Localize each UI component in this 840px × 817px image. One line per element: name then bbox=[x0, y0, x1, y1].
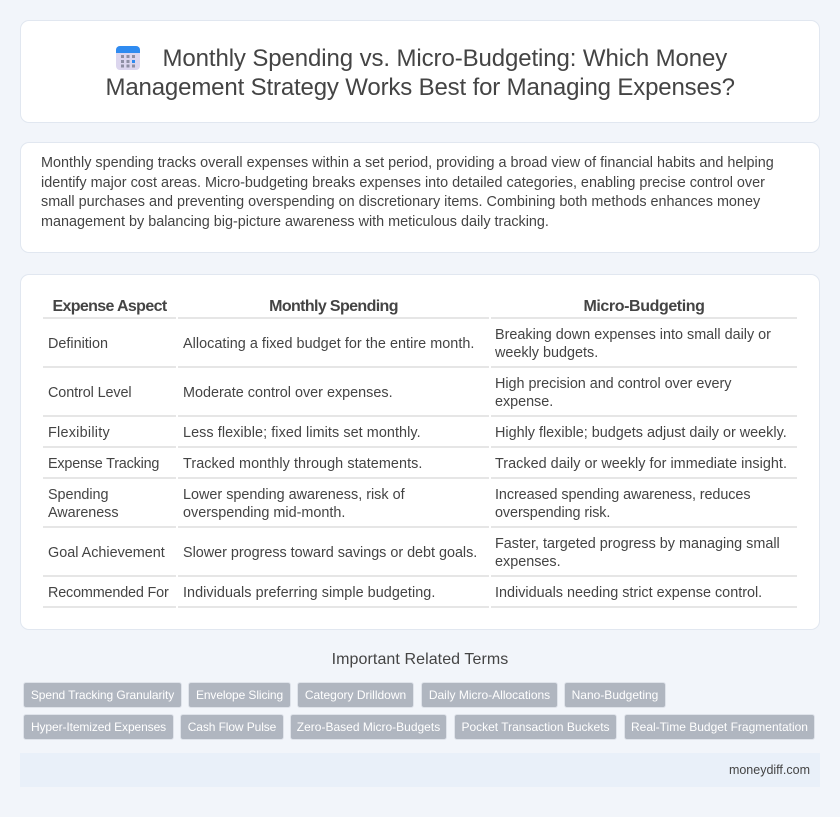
summary text: identify major cost areas. Micro-budgeting breaks expenses into detailed categories, enabling precise control over bbox=[41, 175, 765, 191]
related terms tags: Pocket Transaction Buckets bbox=[461, 720, 610, 734]
title: Monthly Spending vs. Micro-Budgeting: Which Money bbox=[162, 45, 727, 72]
row: flexibility: Flexibility bbox=[48, 425, 110, 441]
row: recommended for: Recommended For bbox=[48, 585, 169, 601]
row: spending awareness: overspending mid-month. bbox=[183, 505, 345, 521]
row: expense tracking: Tracked daily or weekly for immediate insight. bbox=[495, 456, 787, 472]
related terms tags bbox=[23, 682, 815, 740]
panel: header bbox=[20, 20, 820, 123]
related terms heading: Important Related Terms bbox=[332, 651, 508, 668]
summary text: management by balancing big-picture awareness with meticulous daily tracking. bbox=[41, 214, 549, 230]
related terms tags: Envelope Slicing bbox=[196, 688, 283, 702]
panel: summary bbox=[20, 142, 820, 253]
row: recommended for bbox=[48, 585, 762, 601]
row: goal achievement: expenses. bbox=[495, 554, 561, 570]
related terms tags: Category Drilldown bbox=[305, 688, 406, 702]
panel: comparison table bbox=[20, 274, 820, 630]
row: goal achievement: Faster, targeted progress by managing small bbox=[495, 536, 780, 552]
summary text bbox=[41, 155, 774, 230]
row: goal achievement: Slower progress toward savings or debt goals. bbox=[183, 545, 477, 561]
title: Management Strategy Works Best for Managing Expenses? bbox=[106, 74, 735, 101]
row: goal achievement: Goal Achievement bbox=[48, 545, 165, 561]
row: definition bbox=[48, 327, 771, 361]
row: recommended for: Individuals needing strict expense control. bbox=[495, 585, 762, 601]
row: goal achievement bbox=[48, 536, 780, 570]
related terms tags: Hyper-Itemized Expenses bbox=[31, 720, 166, 734]
footer site name: moneydiff.com bbox=[729, 763, 810, 777]
summary text: Monthly spending tracks overall expenses within a set period, providing a broad view of financial habits and helping bbox=[41, 155, 774, 171]
row: spending awareness bbox=[48, 487, 750, 521]
row: definition: weekly budgets. bbox=[495, 345, 598, 361]
table bbox=[43, 298, 797, 608]
related terms tags: Spend Tracking Granularity bbox=[31, 688, 174, 702]
row: flexibility bbox=[48, 425, 787, 441]
table header: Micro-Budgeting bbox=[583, 298, 705, 315]
row: flexibility: Highly flexible; budgets adjust daily or weekly. bbox=[495, 425, 787, 441]
row: expense tracking bbox=[48, 456, 787, 472]
row: control level: Moderate control over expenses. bbox=[183, 385, 393, 401]
row: spending awareness: Lower spending awareness, risk of bbox=[183, 487, 405, 503]
row: control level: High precision and control over every bbox=[495, 376, 731, 392]
row: spending awareness: Increased spending awareness, reduces bbox=[495, 487, 750, 503]
row: recommended for: Individuals preferring simple budgeting. bbox=[183, 585, 435, 601]
title bbox=[106, 45, 735, 101]
table header bbox=[52, 298, 705, 315]
row: flexibility: Less flexible; fixed limits set monthly. bbox=[183, 425, 421, 441]
row: expense tracking: Tracked monthly through statements. bbox=[183, 456, 422, 472]
row: control level: Control Level bbox=[48, 385, 132, 401]
footer bbox=[20, 753, 820, 787]
icon: calendar bbox=[116, 46, 140, 70]
row: spending awareness: Awareness bbox=[48, 505, 118, 521]
related terms tags: Daily Micro-Allocations bbox=[429, 688, 550, 702]
row: definition: Definition bbox=[48, 336, 108, 352]
row: definition: Breaking down expenses into small daily or bbox=[495, 327, 771, 343]
related terms tags: Nano-Budgeting bbox=[572, 688, 658, 702]
row: spending awareness: overspending risk. bbox=[495, 505, 610, 521]
summary text: small purchases and preventing overspending on discretionary items. Combining both methods enhances money bbox=[41, 194, 760, 210]
row: control level: expense. bbox=[495, 394, 553, 410]
related terms tags: Zero-Based Micro-Budgets bbox=[297, 720, 440, 734]
related terms tags: Cash Flow Pulse bbox=[188, 720, 276, 734]
row: definition: Allocating a fixed budget for the entire month. bbox=[183, 336, 474, 352]
row: control level bbox=[48, 376, 732, 410]
related terms tags: Real-Time Budget Fragmentation bbox=[631, 720, 808, 734]
table header: Expense Aspect bbox=[52, 298, 167, 315]
table header: Monthly Spending bbox=[269, 298, 398, 315]
row: spending awareness: Spending bbox=[48, 487, 108, 503]
row: expense tracking: Expense Tracking bbox=[48, 456, 159, 472]
